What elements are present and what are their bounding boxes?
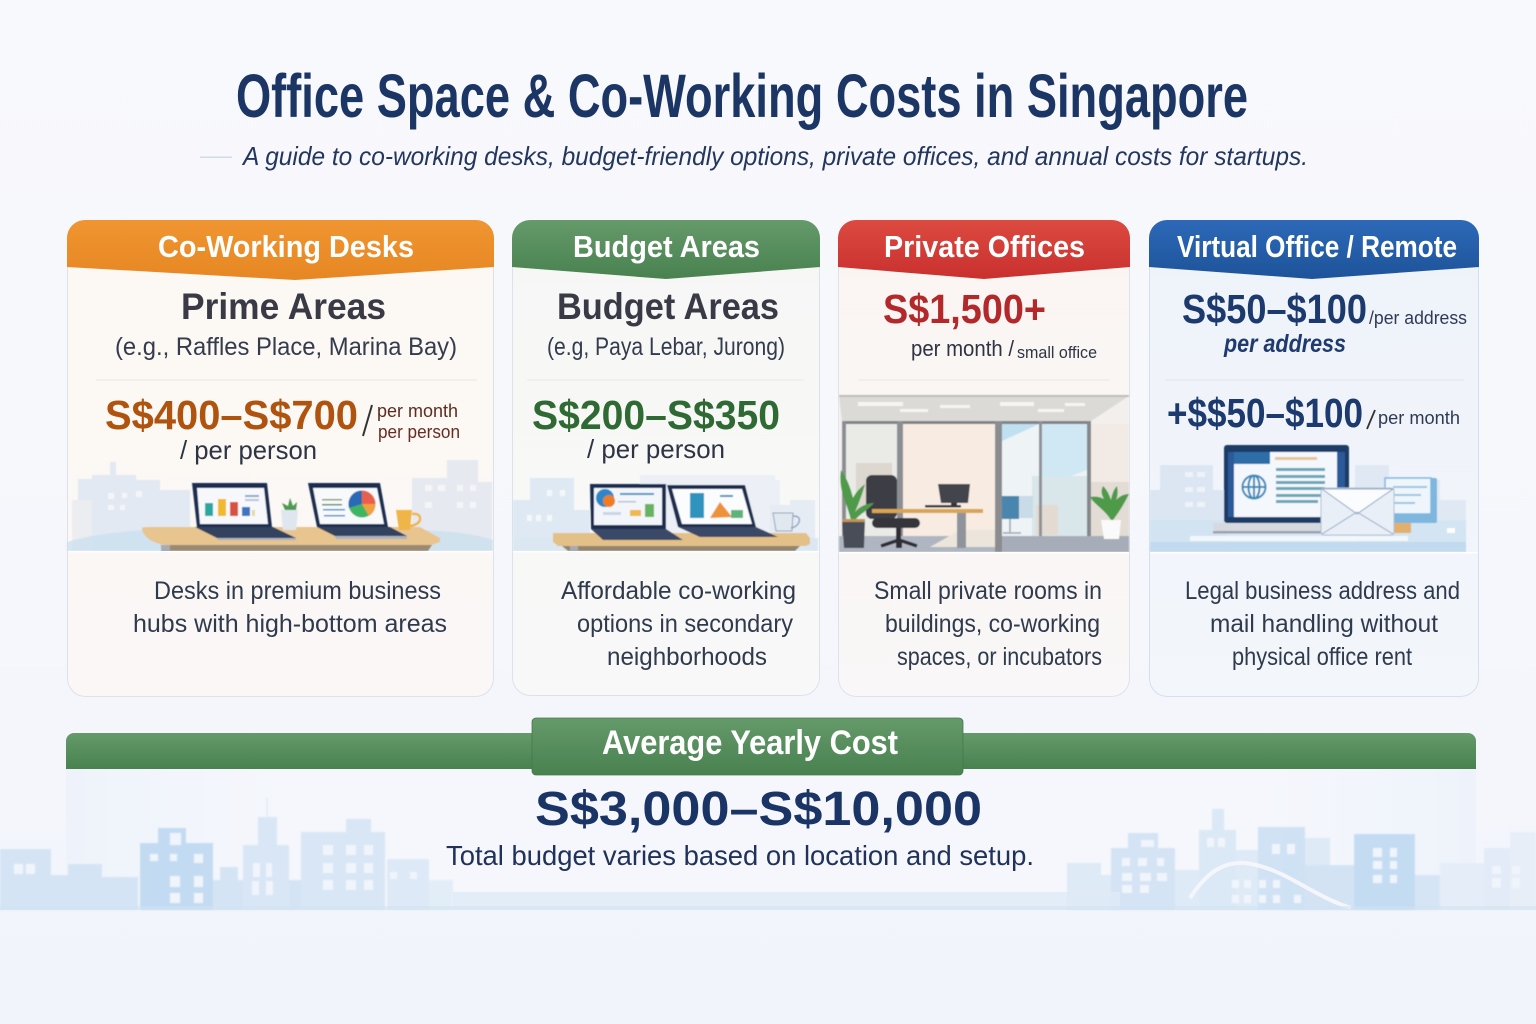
skyline: left <box>0 798 453 910</box>
subtitle: A guide to co-working desks, budget-friendly options, private offices, and annual costs for startups. <box>241 141 1308 171</box>
illustration: laptops on desk <box>513 475 818 552</box>
price: co-working desks: per month <box>377 401 458 421</box>
illustration: laptops on desk <box>67 460 493 552</box>
price: private offices: per month / <box>911 336 1015 361</box>
text: description: Affordable co-working <box>561 577 796 605</box>
price: budget areas: S$200–S$350 <box>532 392 780 438</box>
panel: virtual office <box>1149 220 1479 696</box>
text: description: Desks in premium business <box>154 577 441 605</box>
band: green header <box>66 733 1476 769</box>
price: yearly total: S$3,000–S$10,000 <box>535 783 982 836</box>
price: budget areas <box>532 392 780 464</box>
price: co-working desks: per person <box>378 422 460 442</box>
illustration: laptop and mail <box>1150 445 1466 552</box>
price: monthly: +$$50–$100 <box>1167 390 1363 436</box>
header: private offices <box>838 220 1130 279</box>
text: description: buildings, co-working <box>885 610 1100 638</box>
text: description <box>561 577 796 671</box>
panel: private offices <box>838 220 1130 696</box>
text: description: Small private rooms in <box>874 577 1102 605</box>
price: address: /per address <box>1369 308 1467 328</box>
price: co-working desks <box>105 392 460 465</box>
price: address <box>1182 286 1467 358</box>
header: private offices: Private Offices <box>884 229 1085 264</box>
text: description <box>1185 577 1460 671</box>
header: virtual office: Virtual Office / Remote <box>1177 229 1457 264</box>
price: co-working desks: S$400–S$700 <box>105 392 358 438</box>
price: private offices: S$1,500+ <box>883 286 1046 332</box>
price: private offices: small office <box>1017 343 1097 362</box>
text: example locations: (e.g, Paya Lebar, Jurong) <box>547 333 785 361</box>
text: description <box>133 577 447 638</box>
skyline: right <box>1067 809 1536 910</box>
text: description <box>874 577 1102 671</box>
text: description: hubs with high-bottom areas <box>133 610 447 638</box>
text: description: spaces, or incubators <box>897 643 1102 671</box>
text: description: physical office rent <box>1232 643 1412 671</box>
panel: co-working desks <box>67 220 494 696</box>
text: example locations: (e.g., Raffles Place, Marina Bay) <box>115 333 457 361</box>
price: budget areas: / per person <box>587 434 725 464</box>
text: description: mail handling without <box>1210 610 1438 638</box>
text: description: Legal business address and <box>1185 577 1460 605</box>
header: virtual office <box>1149 220 1479 279</box>
text: budget note: Total budget varies based on location and setup. <box>446 840 1034 871</box>
tab: average yearly cost: Average Yearly Cost <box>602 724 898 762</box>
price: address: per address <box>1223 330 1346 358</box>
ground band <box>453 892 1120 910</box>
heading: prime areas: Prime Areas <box>181 286 386 327</box>
price: co-working desks: / per person <box>180 435 317 465</box>
icon: bridge arc <box>1190 863 1351 908</box>
text: description: options in secondary <box>577 610 793 638</box>
text: description: neighborhoods <box>607 643 767 671</box>
price: monthly: per month <box>1378 408 1460 428</box>
panel: budget areas <box>512 220 820 696</box>
price: private offices <box>883 286 1097 362</box>
price: address: S$50–$100 <box>1182 286 1367 332</box>
heading: budget areas: Budget Areas <box>557 286 779 327</box>
illustration: private office room <box>839 395 1129 552</box>
tab: average yearly cost <box>532 718 963 775</box>
header: budget areas: Budget Areas <box>573 229 760 264</box>
header: co-working desks: Co-Working Desks <box>158 229 414 264</box>
panel: average yearly cost <box>0 718 1536 910</box>
header: co-working desks <box>67 220 494 280</box>
header: budget areas <box>512 220 820 279</box>
